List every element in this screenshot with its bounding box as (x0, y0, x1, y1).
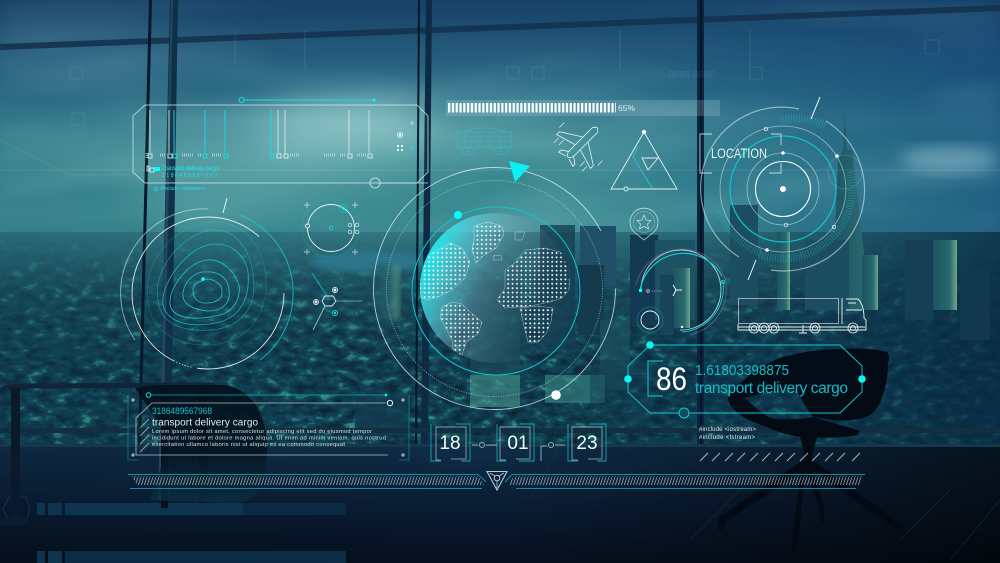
icon: triangle emblem (611, 130, 677, 191)
progress bar 65% (446, 100, 720, 116)
floor (0, 445, 1000, 563)
panel nodes (624, 341, 866, 383)
handle circle (387, 400, 393, 406)
dotted ring (386, 180, 602, 396)
include text: #include <iostream> (699, 427, 756, 433)
progress bar 65%: 65% (618, 103, 635, 113)
panel labels: #include <iostream> (160, 186, 206, 192)
small circle gauge with plus marks (302, 199, 360, 257)
connectors (472, 442, 565, 461)
contour lines (147, 222, 266, 345)
city view (0, 232, 1000, 447)
panel labels: Transport delivery cargo (162, 166, 220, 172)
handle circle (679, 408, 689, 418)
value box (648, 361, 663, 396)
cargo label: transport delivery cargo (695, 380, 848, 397)
info panel, lower left (128, 393, 409, 460)
icon: star location pin (630, 208, 658, 240)
include text (699, 427, 756, 441)
slash icons (140, 419, 149, 452)
location radar (700, 97, 865, 280)
cargo value panel (624, 341, 866, 441)
outer arcs (701, 107, 865, 271)
body text: incididunt ut labore et dolore magna aliqua. Ut enim ad minim veniam, quis nostrud (152, 436, 386, 442)
location label: LOCATION (711, 146, 767, 161)
ghost HUD reflections (0, 30, 939, 175)
vertical gauge ticks (147, 110, 372, 158)
icon: airplane (547, 109, 616, 178)
value 86: 86 (656, 361, 687, 397)
body text: exercitation ullamco laboris nisi ut aliquip ex ea commodo consequat (152, 442, 345, 448)
date digits (439, 433, 598, 454)
panel labels (147, 166, 220, 192)
top-left data panel (133, 98, 428, 192)
connector to panel (380, 182, 428, 184)
panel outline (133, 105, 428, 183)
floor reflection bars (3, 497, 346, 563)
sky background (0, 0, 1000, 270)
front chair silhouette, right (718, 349, 905, 552)
globe (374, 161, 616, 410)
icon: freight train wagon (455, 128, 514, 154)
hatched arcs (720, 119, 852, 259)
handle circle (370, 178, 380, 188)
orbit marker dots (454, 211, 462, 219)
teal ring (730, 136, 836, 242)
date digits: 18 (439, 433, 461, 454)
date digits: 01 (507, 433, 529, 454)
date digits: 23 (576, 433, 598, 454)
skyline towers (355, 112, 990, 435)
icon: cargo truck (738, 298, 866, 333)
globe body (420, 213, 570, 363)
panel outline (628, 345, 862, 413)
white slashes (700, 453, 860, 461)
date boxes (436, 427, 602, 460)
outer ring (374, 168, 616, 410)
date readout (431, 424, 606, 461)
arrow pointer (509, 161, 530, 182)
number: 3186489567968 (152, 406, 212, 417)
corner marks (128, 395, 409, 460)
continents (418, 222, 570, 357)
left contour radar (121, 198, 293, 369)
location label (700, 134, 781, 173)
mini icons (397, 121, 414, 151)
body text: Lorem ipsum dolor sit amet, consectetur adipiscing elit sed do eiusmod tempor (152, 429, 372, 435)
emblem triangle (487, 472, 507, 490)
bottom hatched bars (128, 474, 865, 488)
include text: #include <fstream> (699, 435, 755, 441)
top cyan slider (239, 98, 376, 102)
heading: transport delivery cargo (152, 418, 258, 428)
body text (152, 429, 386, 448)
back chair silhouette, left (135, 385, 267, 503)
ghost HUD reflections: 8889 8686 (668, 70, 716, 81)
golden ratio number: 1.61803398875 (695, 362, 789, 379)
inner rings (747, 153, 819, 225)
teal ring (412, 207, 580, 375)
middle-right arc gauge (636, 249, 726, 335)
horizontal scan line (0, 169, 1000, 171)
node connector icon (312, 273, 362, 330)
panel outline (136, 403, 388, 455)
top cyan line (146, 393, 387, 397)
panel labels: 3186489567968 (162, 173, 217, 179)
thin ring (720, 126, 846, 252)
date box accents (431, 424, 606, 461)
